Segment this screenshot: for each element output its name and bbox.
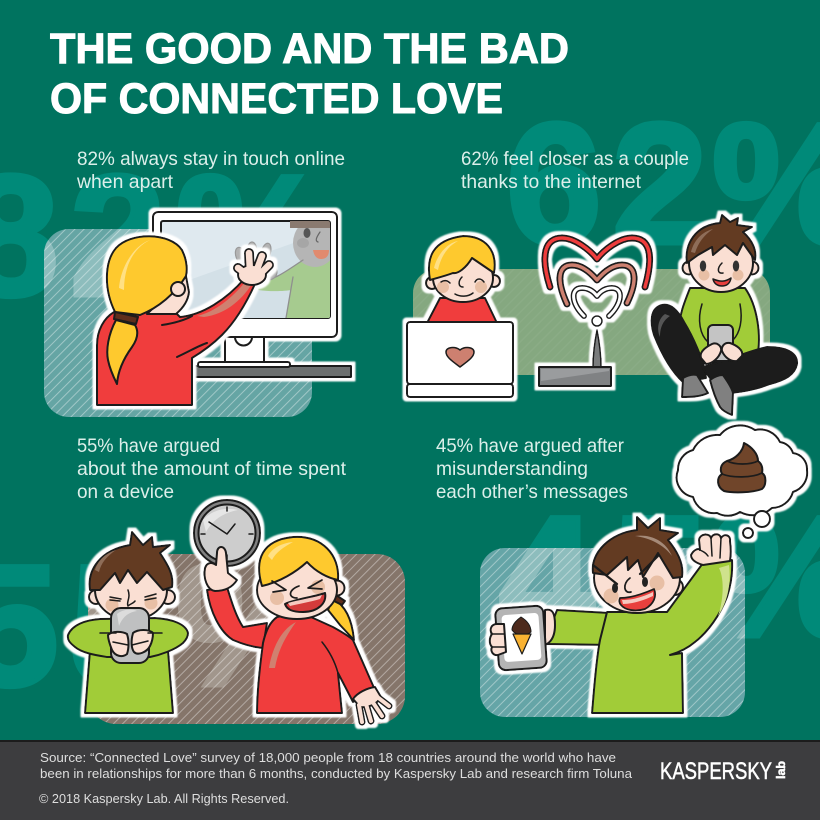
source text: © 2018 Kaspersky Lab. All Rights Reserved. xyxy=(39,792,289,806)
big number 62%: 6 xyxy=(506,88,602,280)
panel: 55% backdrop xyxy=(88,554,405,724)
big number 55%: 5 xyxy=(70,530,166,722)
panel: 45% backdrop: 4 xyxy=(499,481,595,673)
big number 45%: 4 xyxy=(499,481,595,673)
caption: 62%: 62% feel closer as a couple xyxy=(461,148,689,170)
panel: 45% backdrop xyxy=(480,548,745,717)
caption: 55%: about the amount of time spent xyxy=(77,458,347,480)
caption: 45%: 45% have argued after xyxy=(436,435,624,457)
Kaspersky Lab logo: lab xyxy=(774,761,788,779)
title xyxy=(50,25,569,123)
illustration: computer monitor xyxy=(153,212,351,377)
illustration: girl with laptop xyxy=(407,236,513,397)
footer band xyxy=(0,740,820,820)
caption: 45%: each other’s messages xyxy=(436,481,628,503)
big number 82%: 2 xyxy=(70,140,166,332)
illustration: boy sitting cross-legged with phone xyxy=(652,215,797,415)
source text: been in relationships for more than 6 months, conducted by Kaspersky Lab and research firm Toluna xyxy=(40,767,632,781)
illustration: thought bubble with poop emoji xyxy=(677,425,807,538)
illustration: woman waving at screen xyxy=(97,236,269,405)
panel: 55% backdrop: % xyxy=(176,530,329,722)
caption: 82%: when apart xyxy=(76,171,174,193)
big number 82%: % xyxy=(176,140,329,332)
panel: 82% backdrop: 2 xyxy=(70,140,166,332)
big number 82% xyxy=(0,140,329,332)
caption: 82%: 82% always stay in touch online xyxy=(77,148,345,170)
big number 55% xyxy=(0,530,329,722)
title: OF CONNECTED LOVE xyxy=(50,75,503,123)
panel: 62% backdrop xyxy=(413,269,770,375)
big number 62% xyxy=(506,88,820,280)
caption: 82% xyxy=(76,148,345,193)
source text: Source: “Connected Love” survey of 18,000 people from 18 countries around the world who have xyxy=(40,751,616,765)
source text xyxy=(39,751,632,806)
panel: 82% backdrop: % xyxy=(176,140,329,332)
caption: 62%: thanks to the internet xyxy=(461,171,642,193)
caption: 55%: on a device xyxy=(77,481,174,503)
footer top border xyxy=(0,740,820,742)
caption: 55%: 55% have argued xyxy=(77,435,220,457)
illustration: angry boy holding phone xyxy=(490,517,732,713)
big number 55%: % xyxy=(176,530,329,722)
panel: 55% backdrop: 5 xyxy=(70,530,166,722)
big number 45%: 5 xyxy=(612,481,708,673)
panel: 82% backdrop xyxy=(44,229,312,417)
caption: 62% xyxy=(461,148,689,193)
illustration: boy frowning at phone xyxy=(68,532,188,713)
Kaspersky Lab logo: KASPERSKY xyxy=(660,758,772,785)
caption: 45% xyxy=(436,435,628,503)
illustration: angry woman pointing at clock xyxy=(194,500,389,722)
big number 62%: 2 xyxy=(612,88,708,280)
caption: 55% xyxy=(77,435,347,503)
illustration: wifi router with heart signal xyxy=(539,238,650,386)
panel: 45% backdrop: 5 xyxy=(612,481,708,673)
big number 45% xyxy=(499,481,820,673)
caption: 45%: misunderstanding xyxy=(436,458,588,480)
title: THE GOOD AND THE BAD xyxy=(50,25,569,73)
